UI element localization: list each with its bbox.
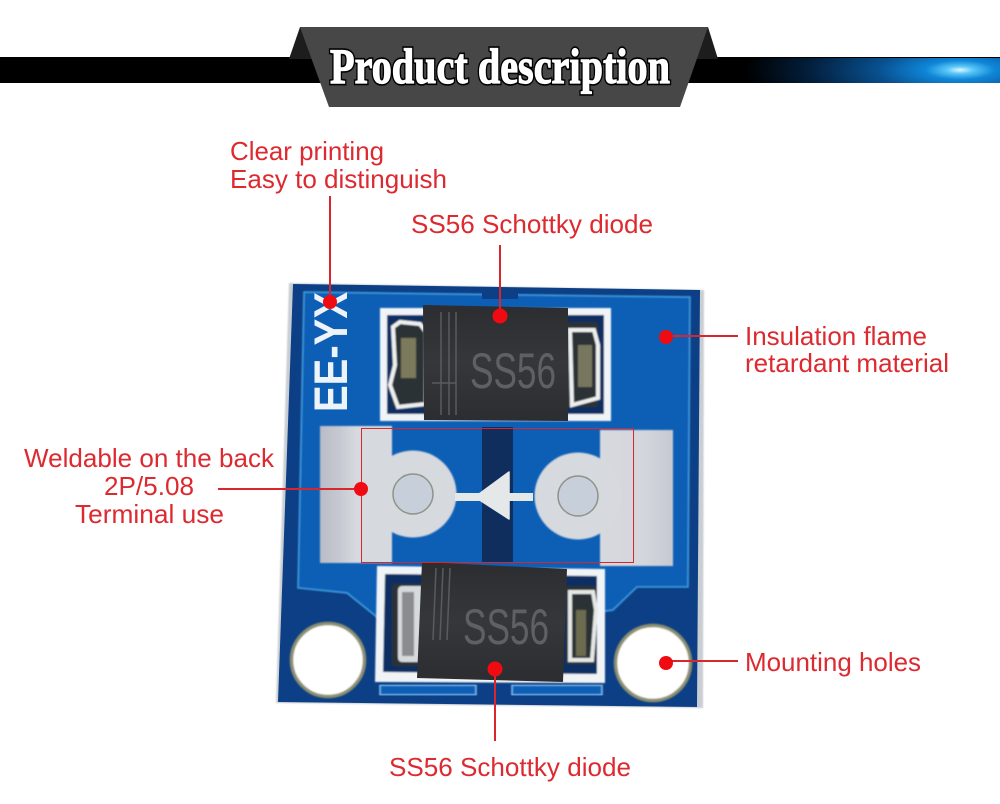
callout: top diode — [411, 209, 653, 324]
callout: bottom diode — [389, 662, 631, 782]
centre dark slot — [482, 427, 513, 563]
label: Weldable on the back — [24, 443, 275, 473]
cathode bands — [432, 312, 456, 415]
label second line: Easy to distinguish — [230, 164, 447, 194]
blue light glow — [740, 58, 1000, 83]
label: Insulation flame — [745, 321, 927, 351]
leader line — [666, 660, 738, 662]
bottom pads — [380, 685, 602, 695]
leader line — [666, 335, 738, 337]
label third line: Terminal use — [75, 499, 224, 529]
marker dot — [659, 656, 673, 670]
right mounting hole — [616, 626, 690, 700]
right solder lead — [566, 586, 596, 664]
top diode pad — [380, 308, 611, 421]
label second line: retardant material — [745, 348, 949, 378]
leader line — [499, 245, 501, 316]
black band — [0, 57, 1000, 83]
top SS56 diode body — [423, 305, 568, 421]
title plate — [300, 27, 708, 107]
part marking: SS56 — [470, 343, 556, 399]
right terminal pad — [534, 430, 673, 566]
leader line — [218, 488, 361, 490]
left ribbon fold — [289, 27, 320, 59]
marker dot — [354, 482, 368, 496]
left mounting hole — [292, 624, 364, 696]
part marking: SS56 — [463, 599, 549, 655]
label: SS56 Schottky diode — [411, 209, 653, 239]
leader line — [494, 669, 496, 741]
callout: weldable back — [24, 443, 368, 529]
board substrate — [278, 284, 700, 707]
marker dot — [488, 662, 502, 676]
header banner — [0, 27, 1000, 107]
right solder lead — [566, 322, 598, 407]
callout: insulation material — [659, 321, 949, 378]
left plated hole — [393, 474, 433, 514]
callout: mounting holes — [659, 647, 921, 677]
right plated hole — [558, 476, 598, 516]
board edge — [276, 283, 704, 708]
terminal highlight box — [362, 428, 634, 562]
marker dot — [659, 330, 673, 344]
label: Clear printing — [230, 136, 384, 166]
title text: Product description — [330, 38, 670, 94]
copper pour area — [298, 292, 690, 618]
bottom diode pad — [375, 566, 605, 683]
left solder lead — [392, 584, 426, 666]
callout: clear printing — [230, 136, 447, 309]
label: Mounting holes — [745, 647, 921, 677]
title — [330, 38, 670, 94]
label: SS56 Schottky diode — [389, 752, 631, 782]
diode symbol — [455, 472, 533, 519]
left terminal pad — [320, 426, 456, 563]
leader line — [329, 196, 331, 302]
dark centre gap top — [482, 289, 518, 299]
bottom SS56 diode body — [417, 562, 567, 682]
marker dot — [492, 308, 508, 324]
PCB module photo — [276, 283, 704, 708]
label second line: 2P/5.08 — [104, 471, 194, 501]
cathode bands — [433, 568, 450, 640]
left solder lead — [390, 322, 426, 407]
title outline: Product description — [330, 38, 670, 94]
silk print: EE-YX — [304, 292, 357, 412]
right ribbon fold — [690, 27, 718, 59]
marker dot — [323, 295, 337, 309]
